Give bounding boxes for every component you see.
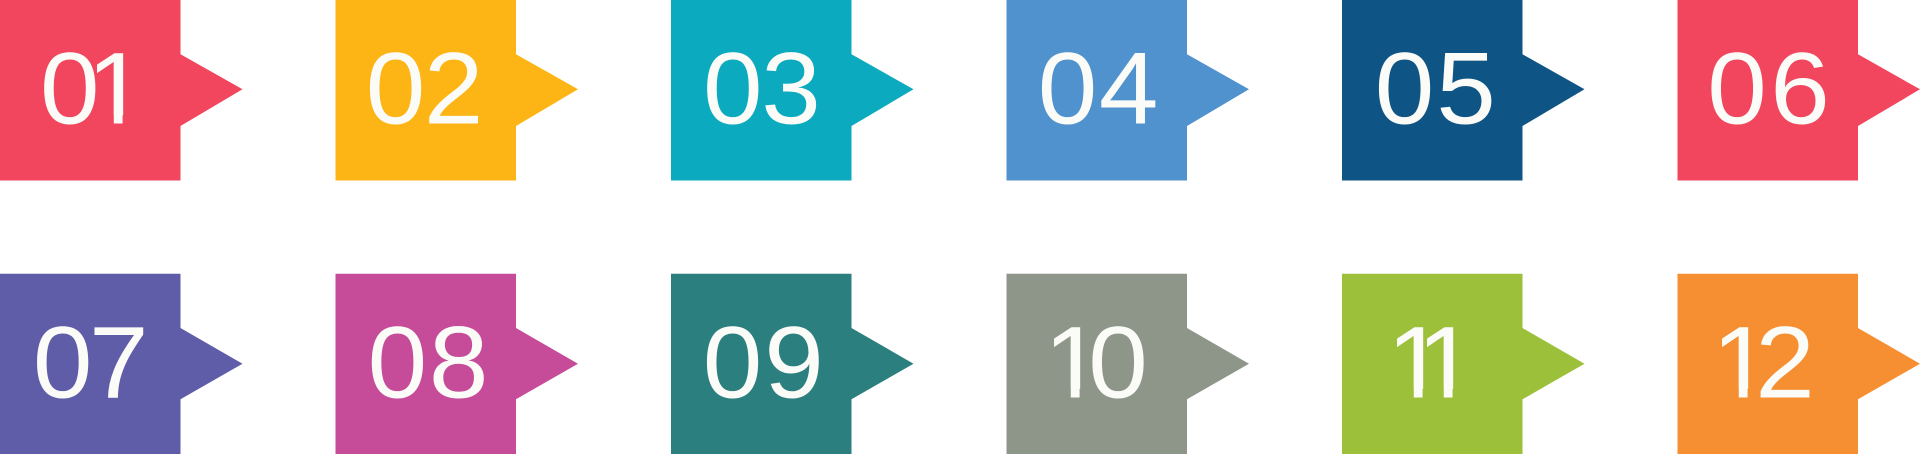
number 07: 7 (89, 306, 149, 420)
badge 07 (0, 274, 242, 454)
arrow tag 12 (1678, 274, 1920, 454)
number 02: 0 (366, 32, 425, 146)
number 01: 1 (87, 32, 146, 146)
number 04: 0 (1038, 32, 1097, 146)
badge 04 (1006, 0, 1249, 180)
number 06 (1707, 32, 1830, 146)
number 10: 1 (1044, 306, 1103, 420)
badge 11 (1342, 274, 1584, 454)
badge 03 (671, 0, 914, 180)
arrow tag 04 (1006, 0, 1249, 180)
arrow tag 02 (336, 0, 578, 180)
number 01: 0 (40, 32, 100, 146)
number 12: 2 (1755, 306, 1815, 420)
number 03 (703, 32, 821, 146)
number 07 (33, 306, 149, 420)
badge 10 (1006, 274, 1249, 454)
badge 08 (336, 274, 578, 454)
arrow tag 09 (671, 274, 914, 454)
badge 12 (1678, 274, 1920, 454)
badge 06 (1678, 0, 1920, 180)
number 05: 0 (1375, 32, 1434, 146)
number 04: 4 (1099, 32, 1158, 146)
arrow tag 01 (0, 0, 242, 180)
arrow tag 10 (1006, 274, 1249, 454)
arrow tag 07 (0, 274, 242, 454)
arrow tag 08 (336, 274, 578, 454)
number 11: 1 (1417, 306, 1476, 420)
number 07: 0 (33, 306, 92, 420)
number 11 (1397, 327, 1454, 398)
number 10: 0 (1088, 306, 1148, 420)
number 03: 3 (761, 32, 821, 146)
number 08: 0 (368, 306, 427, 420)
number 09: 9 (764, 306, 824, 420)
number 02 (366, 32, 483, 146)
number 08: 8 (429, 306, 488, 420)
number 03: 0 (703, 32, 763, 146)
number 05: 5 (1436, 32, 1496, 146)
arrow tag 11 (1342, 274, 1584, 454)
badge 09 (671, 274, 914, 454)
number 08 (368, 306, 488, 420)
number 04 (1038, 32, 1158, 146)
badge 05 (1342, 0, 1584, 180)
number 02: 2 (424, 32, 483, 146)
number 09: 0 (703, 306, 762, 420)
number 01 (44, 52, 124, 124)
badge 01 (0, 0, 242, 180)
badge 02 (336, 0, 578, 180)
number 10 (1054, 326, 1144, 398)
number 09 (703, 306, 824, 420)
number 11: 1 (1387, 306, 1446, 420)
arrow tag 05 (1342, 0, 1584, 180)
number 05 (1375, 32, 1496, 146)
number 12 (1722, 326, 1810, 398)
number 12: 1 (1712, 306, 1771, 420)
arrow tag 06 (1678, 0, 1920, 180)
number 06: 0 (1707, 32, 1767, 146)
arrow tag 03 (671, 0, 914, 180)
number 06: 6 (1770, 32, 1830, 146)
